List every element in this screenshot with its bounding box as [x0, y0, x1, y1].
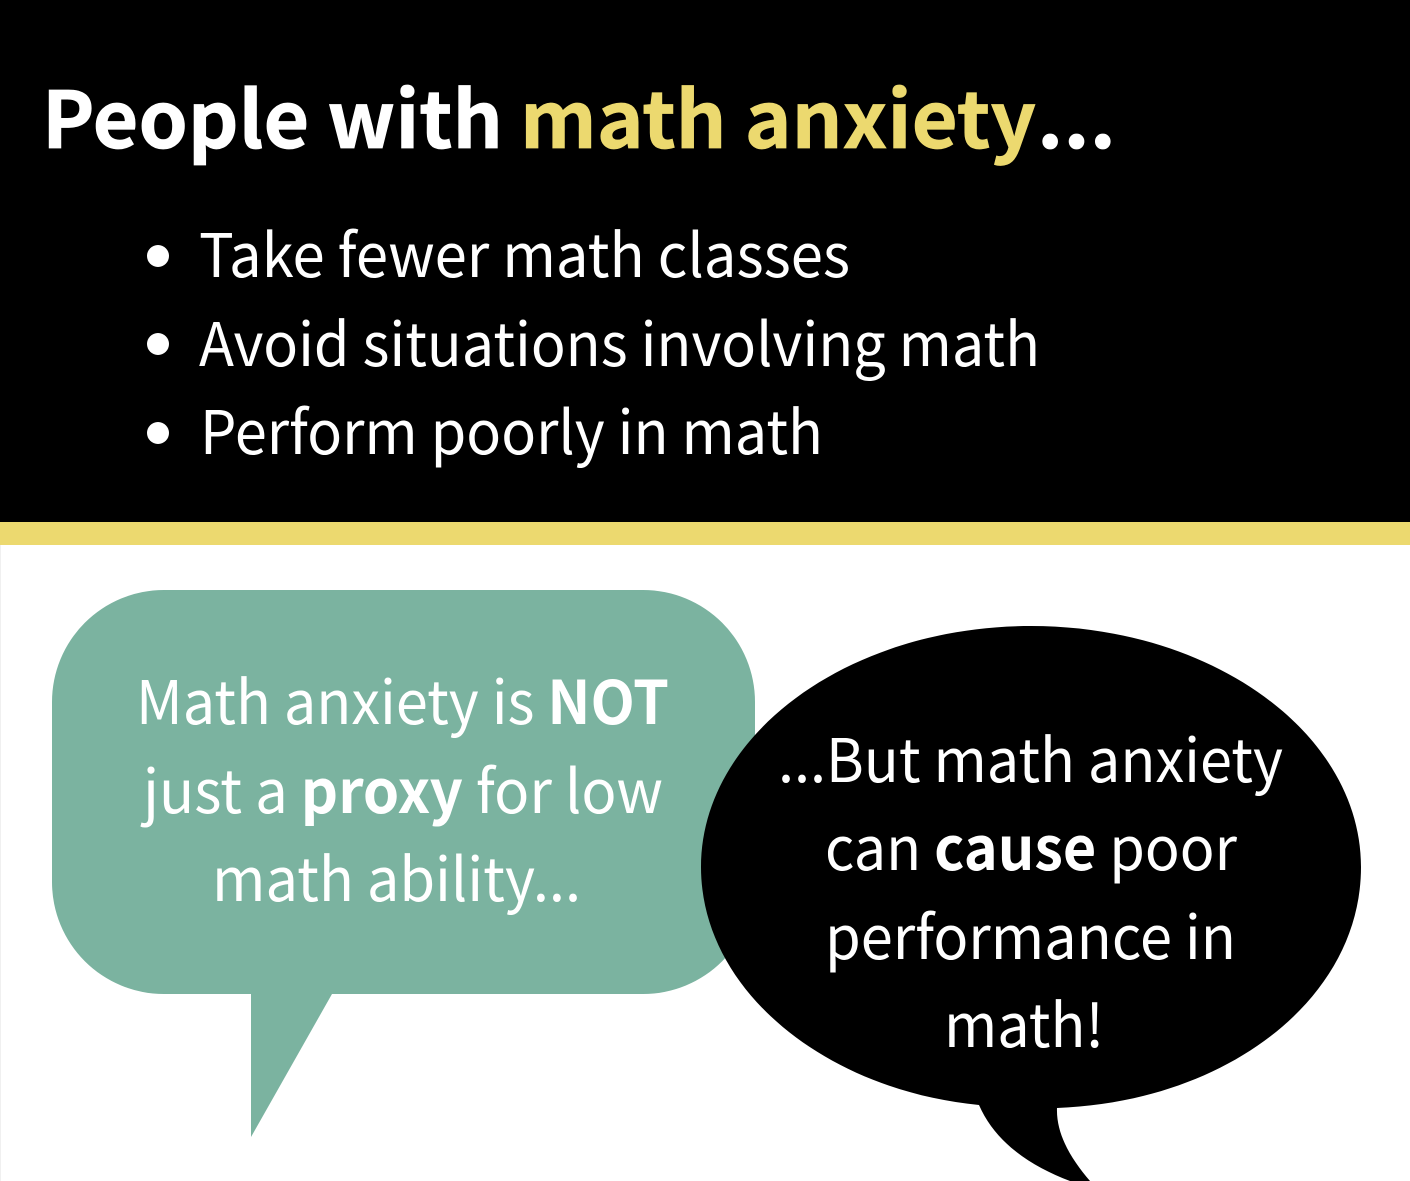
yellow divider band — [0, 522, 1410, 545]
black bubble text: math! — [944, 978, 1104, 1065]
title: People with — [42, 59, 503, 171]
black bubble text: ...But math anxiety — [778, 713, 1283, 800]
black bubble text: performance in — [825, 890, 1236, 977]
title: math anxiety — [520, 59, 1036, 171]
bullet list — [147, 208, 1040, 472]
speech bubble: black — [701, 626, 1361, 1181]
panel: black header — [0, 0, 1410, 522]
title — [42, 59, 1116, 171]
green bubble text: math ability... — [212, 832, 581, 919]
green bubble text — [136, 655, 669, 919]
bullet 2: Avoid situations involving math — [199, 297, 1040, 384]
black bubble text — [778, 713, 1283, 1065]
bullet 3: Perform poorly in math — [200, 385, 823, 472]
green bubble text: Math anxiety is NOT — [136, 655, 669, 742]
bullet 1: Take fewer math classes — [199, 208, 850, 295]
black bubble text: can cause poor — [825, 801, 1238, 888]
green bubble text: just a proxy for low — [140, 744, 663, 831]
speech bubble: green — [52, 590, 755, 1137]
title: ... — [1037, 59, 1116, 171]
